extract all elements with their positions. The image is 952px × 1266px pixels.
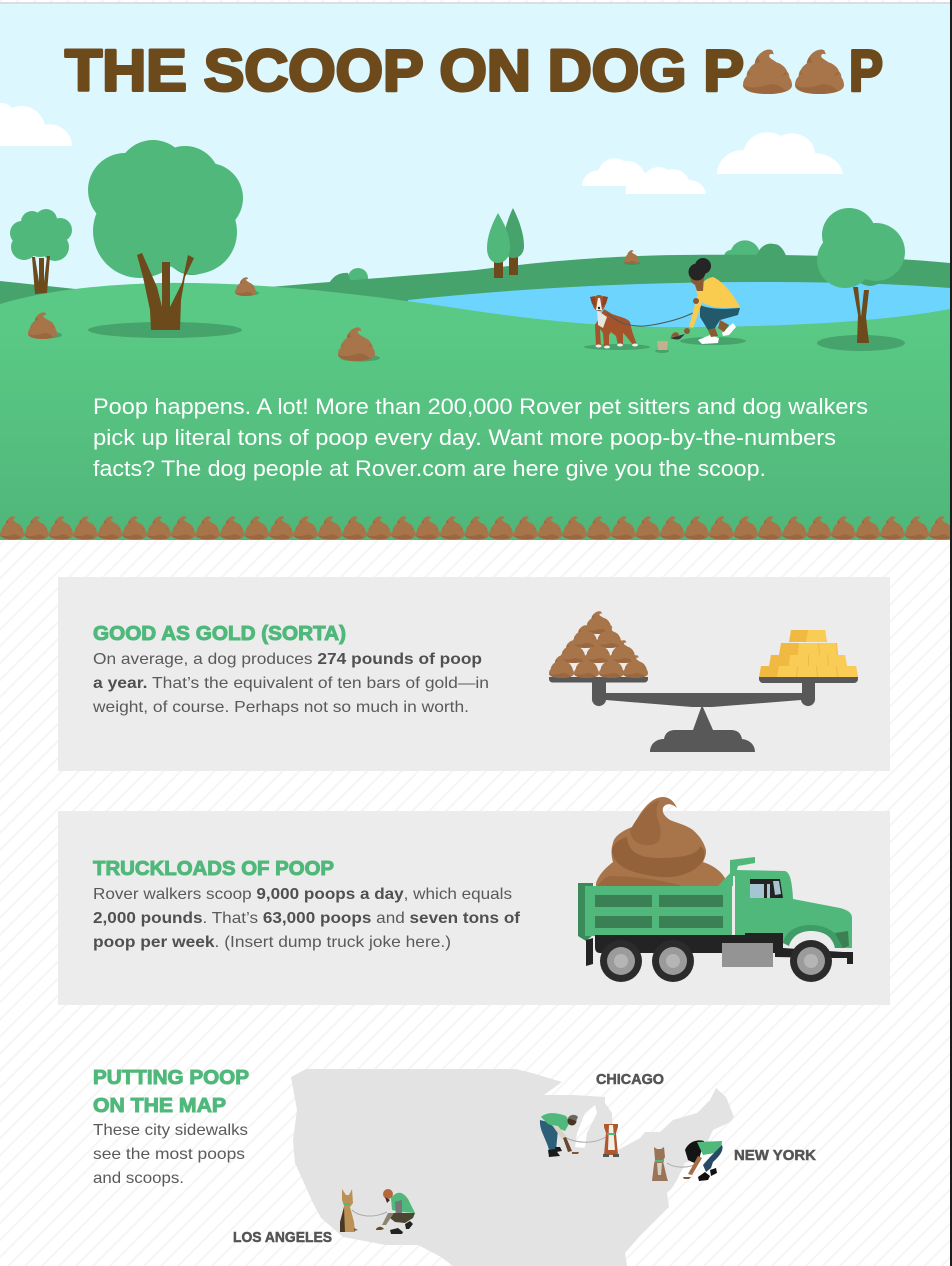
label: New York: NEW YORK <box>734 1148 817 1164</box>
tall trees <box>483 208 527 282</box>
text: good as gold: a year. That’s the equivalent of ten bars of gold—in <box>93 675 489 692</box>
big tree <box>88 140 243 338</box>
leash <box>607 312 695 326</box>
lake <box>408 282 950 345</box>
panel: good as gold <box>58 577 890 771</box>
dog on a leash <box>584 295 650 350</box>
icon: dump truck with poop <box>578 797 853 982</box>
text: map intro: These city sidewalks <box>93 1122 248 1139</box>
title: THE SCOOP ON DOG P <box>65 38 744 104</box>
woman scooping <box>670 258 746 345</box>
bag holder <box>655 341 669 353</box>
title: P <box>849 38 883 104</box>
text: truckloads: poop per week . (Insert dump truck joke here.) <box>93 934 451 951</box>
Chicago walker and dog <box>540 1113 619 1157</box>
bushes <box>328 240 787 288</box>
map of the United States <box>291 1069 734 1266</box>
right tree <box>817 208 905 351</box>
panel: truckloads of poop <box>58 797 890 1005</box>
text: truckloads: Rover walkers scoop 9,000 poops a day , which equals <box>93 886 512 903</box>
heading: putting poop on the map: ON THE MAP <box>93 1095 226 1117</box>
text: good as gold: On average, a dog produces 274 pounds of poop <box>93 651 482 668</box>
text: truckloads <box>93 886 521 951</box>
intro text: pick up literal tons of poop every day. Want more poop-by-the-numbers <box>93 425 836 450</box>
clouds <box>0 103 843 194</box>
heading: good as gold: GOOD AS GOLD (SORTA) <box>93 623 346 645</box>
small tree <box>10 209 72 294</box>
New York walker and dog <box>652 1140 723 1181</box>
intro text: facts? The dog people at Rover.com are here give you the scoop. <box>93 456 766 481</box>
text: map intro <box>93 1122 248 1187</box>
label: Los Angeles: LOS ANGELES <box>233 1230 332 1246</box>
text: good as gold <box>92 651 489 716</box>
heading: putting poop on the map: PUTTING POOP <box>93 1067 249 1089</box>
sky <box>0 4 950 304</box>
heading: truckloads: TRUCKLOADS OF POOP <box>93 858 334 880</box>
text: map intro: and scoops. <box>93 1170 184 1187</box>
back hills <box>0 255 950 330</box>
Los Angeles walker and dog <box>340 1189 415 1234</box>
text: map intro: see the most poops <box>93 1146 245 1163</box>
icon: balance scale <box>549 611 858 752</box>
intro text <box>93 394 868 481</box>
heading: putting poop on the map <box>93 1067 249 1117</box>
label: Chicago: CHICAGO <box>596 1072 664 1088</box>
text: good as gold: weight, of course. Perhaps not so much in worth. <box>92 699 469 716</box>
poop piles on the meadow <box>28 250 640 362</box>
text: truckloads: 2,000 pounds . That’s 63,000 poops and seven tons of <box>93 910 521 927</box>
meadow hill <box>0 283 950 540</box>
poop border <box>0 516 950 540</box>
intro text: Poop happens. A lot! More than 200,000 Rover pet sitters and dog walkers <box>93 394 868 419</box>
